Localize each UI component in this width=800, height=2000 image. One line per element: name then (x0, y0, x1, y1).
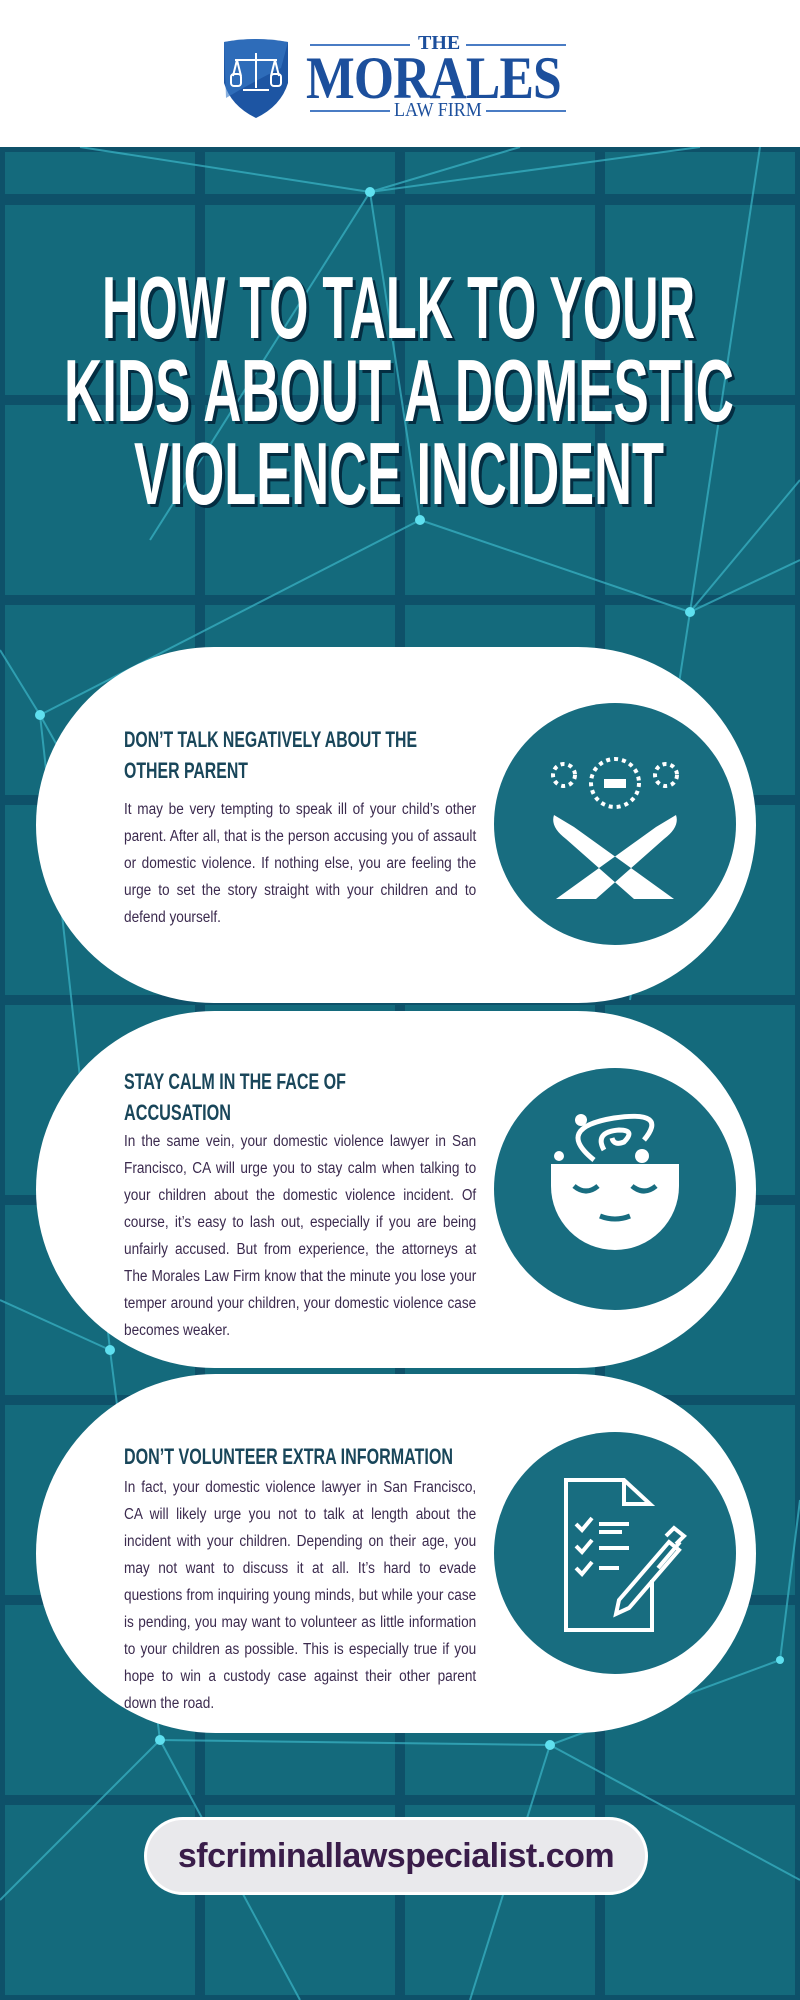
heading (124, 727, 417, 783)
panel: stay calm (36, 1011, 756, 1368)
heading (124, 1069, 346, 1125)
icon: calm head (494, 1068, 736, 1310)
footer url pill (144, 1817, 648, 1895)
text block: In fact, your domestic violence lawyer in San Francisco, CA will likely urge you not to talk at length about the incident with your children. Depending on their age, you may not want to discuss it at all. It’s hard to evade questions from inquiring young minds, but while your case is pending, you may want to volunteer as little information to your children as possible. This is especially true if you hope to win a custody case against their other parent down the road. (124, 1479, 476, 1712)
logo text: MORALES (306, 45, 561, 111)
title (64, 258, 736, 523)
logo text: LAW FIRM (394, 99, 482, 121)
logo text: THE (418, 32, 460, 54)
header: logo (0, 0, 800, 147)
icon: crossed hands (494, 703, 736, 945)
heading: STAY CALM IN THE FACE OF (124, 1069, 346, 1094)
heading: OTHER PARENT (124, 758, 248, 783)
heading: ACCUSATION (124, 1100, 231, 1125)
text block: It may be very tempting to speak ill of your child’s other parent. After all, that is the person accusing you of assault or domestic violence. If nothing else, you are feeling the urge to set the story straight with your children and to defend yourself. (124, 801, 476, 926)
text block: In the same vein, your domestic violence lawyer in San Francisco, CA will urge you to stay calm when talking to your children about the domestic violence incident. Of course, it’s easy to lash out, especially if you are being unfairly accused. But from experience, the attorneys at The Morales Law Firm know that the minute you lose your temper around your children, your domestic violence case becomes weaker. (124, 1133, 476, 1339)
panel: don't volunteer (36, 1374, 756, 1733)
footer url pill: sfcriminallawspecialist.com (178, 1836, 614, 1874)
panel: don't talk negatively (36, 647, 756, 1003)
icon: checklist with pen (494, 1432, 736, 1674)
icon: shield with scales (224, 39, 288, 118)
